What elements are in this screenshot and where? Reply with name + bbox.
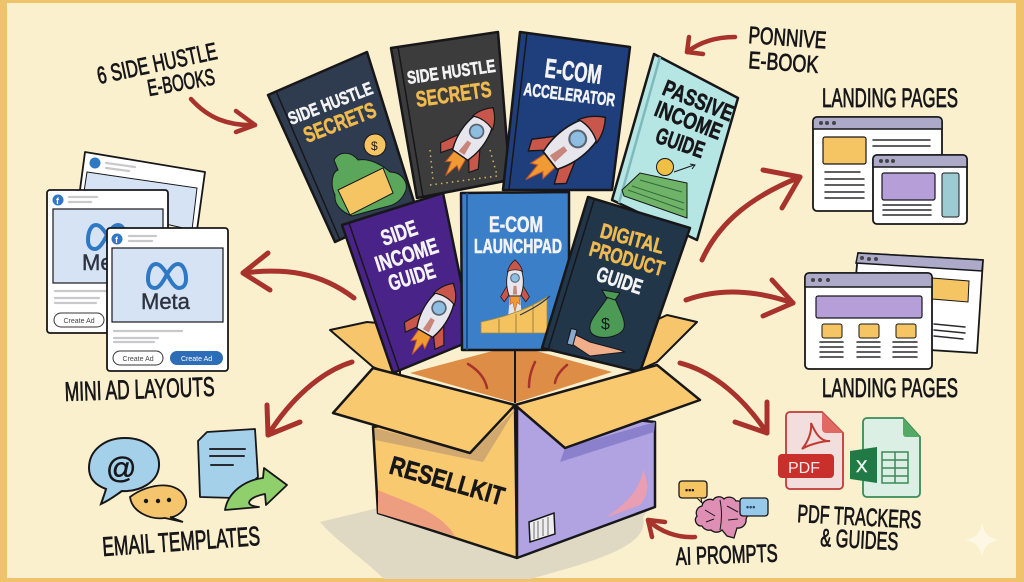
box front right flap	[515, 365, 700, 448]
box interior and back flaps	[330, 315, 697, 403]
book: e-com accelerator: E-COM	[543, 53, 603, 90]
ad card: front: Create Ad	[122, 356, 154, 363]
book: e-com launchpad: E-COM	[489, 212, 543, 237]
arrow: to landing pages top	[702, 170, 800, 260]
label: six side hustle ebooks: 6 SIDE HUSTLE	[95, 38, 220, 90]
icon: excel file	[850, 418, 920, 497]
arrow: to email templates	[267, 362, 352, 435]
icon: pdf file: PDF	[788, 460, 820, 477]
book: e-com launchpad: LAUNCHPAD	[474, 236, 562, 258]
arrow: to landing pages lower	[686, 280, 793, 316]
arrow: six ebooks to books	[191, 99, 255, 132]
label: passive ebook: E-BOOK	[748, 47, 819, 79]
icon: excel file: X	[856, 457, 867, 476]
book: side hustle secrets charcoal: SECRETS	[414, 77, 493, 112]
ad card: front: Meta	[141, 289, 191, 314]
box label: RESELLKIT	[386, 450, 508, 511]
book: digital product guide: $	[601, 316, 610, 333]
icon: landing page windows top	[813, 117, 967, 224]
icon: ai brain	[679, 481, 768, 538]
label: pdf trackers and guides: & GUIDES	[820, 524, 899, 556]
label: six side hustle ebooks	[95, 38, 220, 101]
label: six side hustle ebooks: E-BOOKS	[145, 64, 217, 101]
arrow: to pdf trackers	[680, 363, 767, 433]
icon: ai brain: •••	[685, 485, 694, 495]
ad card: back	[78, 152, 205, 230]
book: passive income guide	[612, 54, 738, 240]
book: digital product guide: PRODUCT	[587, 238, 667, 281]
ad card: middle	[47, 190, 168, 333]
icon: landing page windows lower	[805, 253, 983, 369]
book: side income guide: INCOME	[372, 233, 441, 277]
book: side hustle secrets slate: SIDE HUSTLE	[285, 78, 376, 129]
box barcode	[529, 513, 555, 542]
box: resellkit	[333, 365, 700, 558]
box side face	[517, 407, 655, 558]
label: mini ad layouts: MINI AD LAYOUTS	[64, 372, 215, 407]
ad card: middle: Create Ad	[64, 318, 95, 325]
book: e-com accelerator: ACCELERATOR	[523, 79, 616, 110]
icon: ai brain: •••	[746, 502, 755, 512]
book: passive income guide: PASSIVE	[659, 75, 737, 126]
book: side hustle secrets charcoal: SIDE HUSTLE	[406, 56, 497, 88]
book: side hustle secrets charcoal	[391, 32, 512, 198]
book: side hustle secrets slate: $	[371, 139, 378, 153]
ad card: middle: f	[56, 196, 60, 206]
icon: email bubbles: @	[106, 452, 136, 485]
book: passive income guide: INCOME	[651, 95, 726, 145]
icon: document with share arrow	[198, 429, 287, 510]
box pink scuff	[605, 470, 647, 518]
box front face	[373, 407, 517, 558]
book: side income guide: SIDE	[377, 215, 421, 251]
box flap shadow	[375, 410, 515, 462]
ad card: middle: Meta	[82, 250, 132, 275]
book: side hustle secrets slate: SECRETS	[300, 97, 380, 148]
icon: pdf file	[778, 412, 843, 489]
label: pdf trackers and guides	[797, 500, 922, 556]
book: side hustle secrets slate	[268, 52, 415, 242]
box front left flap	[333, 368, 515, 453]
box floor shadow	[320, 500, 655, 579]
sparkle watermark	[965, 523, 999, 557]
arrow: passive ebook label	[687, 37, 735, 54]
ad card: front	[107, 228, 228, 371]
label: passive ebook: PONNIVE	[748, 22, 827, 54]
icon: email bubbles	[89, 438, 186, 522]
book: side income guide	[342, 193, 473, 373]
ad card: front: Create Ad	[181, 356, 212, 363]
arrow: to ai prompts	[648, 520, 695, 537]
book: passive income guide: GUIDE	[652, 122, 708, 163]
label: passive ebook	[748, 22, 827, 79]
arrow: to ad layouts	[243, 253, 354, 298]
label: ai prompts: AI PROMPTS	[675, 539, 778, 571]
book: digital product guide: DIGITAL	[598, 220, 667, 259]
box side shadow	[560, 422, 655, 462]
book: digital product guide: GUIDE	[593, 263, 645, 299]
label: email templates: EMAIL TEMPLATES	[101, 521, 261, 562]
box pink corner	[378, 490, 455, 536]
book: e-com launchpad	[461, 192, 569, 350]
book: e-com accelerator	[503, 32, 630, 202]
book: digital product guide	[542, 197, 690, 372]
label: pdf trackers and guides: PDF TRACKERS	[797, 500, 922, 534]
book: side income guide: GUIDE	[385, 258, 438, 296]
ad card: front: f	[115, 235, 119, 245]
